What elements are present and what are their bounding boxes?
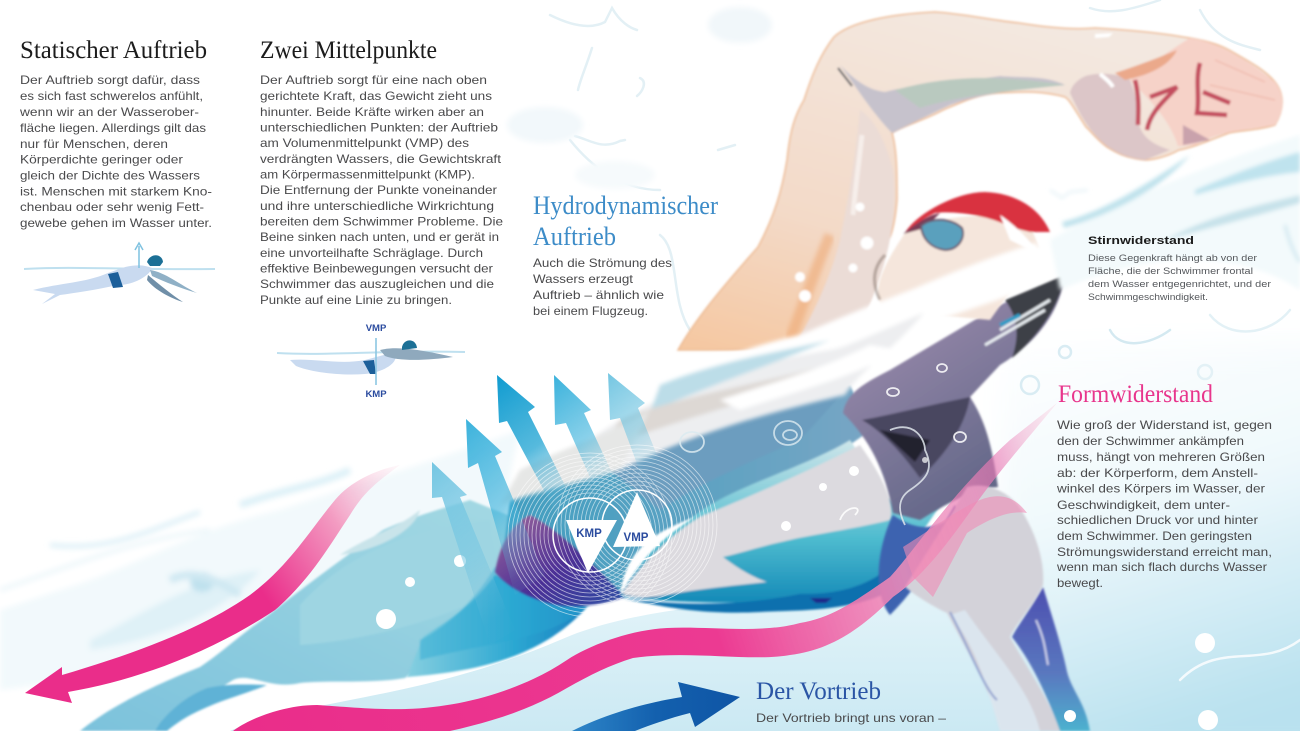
KMP label: KMP	[576, 528, 602, 540]
body text: Schwimmgeschwindigkeit.	[1088, 292, 1208, 303]
text block: Statischer Auftrieb	[19, 37, 212, 230]
body text: effektive Beinbewegungen versucht der	[260, 262, 493, 276]
body text	[19, 73, 212, 230]
pink wave arrow: form drag along the body	[233, 403, 1057, 731]
pink wake arrow pointing left	[25, 465, 400, 703]
body text: fläche liegen. Allerdings gilt das	[20, 121, 206, 135]
body text: Auftrieb – ähnlich wie	[533, 288, 664, 302]
body text: Strömungswiderstand erreicht man,	[1057, 545, 1272, 559]
body text: eine unvorteilhafte Schräglage. Durch	[260, 246, 483, 260]
swimmer: torso side and hip	[495, 385, 870, 606]
body text: verdrängten Wassers, die Gewichtskraft	[260, 152, 502, 166]
VMP label: VMP	[366, 323, 387, 334]
body text: Punkte auf eine Linie zu bringen.	[260, 293, 452, 307]
body text	[1088, 253, 1271, 303]
body text: gewebe gehen im Wasser unter.	[20, 216, 212, 230]
KMP label: KMP	[365, 389, 387, 400]
water splash on the left	[0, 430, 520, 690]
body text: hinunter. Beide Kräfte wirken aber an	[260, 105, 484, 119]
arrow 4	[554, 375, 620, 500]
body text: am Körpermassenmittelpunkt (KMP).	[260, 168, 475, 182]
body text: dem Wasser entgegenrichtet, und der	[1088, 279, 1271, 290]
swimmer: front leg	[905, 486, 1090, 731]
heading: Der Vortrieb	[756, 678, 881, 705]
body text: Fläche, die der Schwimmer frontal	[1088, 266, 1253, 277]
body text: unterschiedlichen Punkten: der Auftrieb	[260, 120, 498, 134]
body text: bewegt.	[1057, 576, 1103, 590]
arrow 5	[608, 373, 665, 485]
body text: ist. Menschen mit starkem Kno-	[20, 184, 212, 198]
icon: small swimmer with VMP and KMP	[277, 323, 465, 400]
body text: muss, hängt von mehreren Größen	[1057, 450, 1265, 464]
icon: small swimmer floating at the surface	[24, 243, 215, 304]
heading: Statischer Auftrieb	[20, 37, 207, 64]
body text: chenbau oder sehr wenig Fett-	[20, 200, 204, 214]
body text: am Volumenmittelpunkt (VMP) des	[260, 136, 469, 150]
text block: Stirnwiderstand	[1088, 235, 1271, 303]
swimmer: head with red cap and goggles	[875, 192, 1050, 320]
VMP label: VMP	[624, 532, 649, 544]
heading: Zwei Mittelpunkte	[260, 37, 437, 64]
swimmer: hip and thigh	[407, 567, 590, 677]
body text: Der Vortrieb bringt uns voran –	[756, 711, 946, 725]
arrow 3	[497, 375, 585, 530]
concentric rings around the centre points	[508, 445, 717, 617]
blue lift arrows	[432, 373, 665, 645]
body text	[1056, 418, 1272, 590]
KMP and VMP markers	[553, 490, 672, 573]
body text: dem Schwimmer. Den geringsten	[1057, 529, 1252, 543]
body text: Geschwindigkeit, dem unter-	[1057, 498, 1230, 512]
body text: schiedlichen Druck vor und hinter	[1057, 513, 1258, 527]
pink band across the front leg	[903, 496, 1027, 597]
text block: Formwiderstand	[1056, 381, 1272, 590]
water squiggles in the background	[550, 0, 1300, 680]
body text: und ihre unterschiedliche Wirkrichtung	[260, 199, 494, 213]
swimmer: raised arm	[678, 12, 1282, 350]
KMP triangle	[566, 520, 617, 573]
body text: Wassers erzeugt	[533, 272, 634, 286]
body text: den der Schwimmer ankämpfen	[1057, 434, 1244, 448]
body text	[260, 73, 503, 307]
body text: winkel des Körpers im Wasser, der	[1056, 482, 1265, 496]
body text: es sich fast schwerelos anfühlt,	[20, 89, 203, 103]
swimmer: rear leg and foot	[80, 500, 520, 731]
heading: Auftrieb	[533, 222, 616, 251]
water streaks to the right of the head	[1050, 135, 1300, 290]
body text: Schwimmer das auszugleichen und die	[260, 277, 494, 291]
body text: Auch die Strömung des	[533, 256, 672, 270]
dark blue propulsion arrow	[572, 682, 740, 731]
water swash across the swimmer	[500, 240, 1060, 505]
body text: bereiten dem Schwimmer Probleme. Die	[260, 214, 503, 228]
body text: wenn man sich flach durchs Wasser	[1056, 560, 1267, 574]
body text: nur für Menschen, deren	[20, 137, 168, 151]
arrow 2	[466, 419, 545, 595]
arrow 1	[432, 462, 515, 645]
text block: Zwei Mittelpunkte	[260, 37, 503, 307]
body text: gerichtete Kraft, das Gewicht zieht uns	[260, 89, 492, 103]
swimmer: chest and dark swimsuit area	[843, 275, 1065, 615]
body text: Der Auftrieb sorgt für eine nach oben	[260, 73, 487, 87]
bubbles and squiggles on the body	[680, 364, 966, 525]
text block: Der Vortrieb	[756, 678, 946, 725]
heading	[533, 191, 718, 251]
heading: Stirnwiderstand	[1088, 235, 1194, 247]
body text: Wie groß der Widerstand ist, gegen	[1057, 418, 1272, 432]
body text: Der Auftrieb sorgt dafür, dass	[20, 73, 200, 87]
VMP triangle	[613, 492, 660, 547]
body text: wenn wir an der Wasserober-	[19, 105, 199, 119]
body text: Körperdichte geringer oder	[20, 152, 183, 166]
body text: bei einem Flugzeug.	[533, 304, 648, 318]
swimmer: cream thigh and teal belly	[620, 440, 960, 613]
text block: Hydrodynamischer Auftrieb	[533, 191, 718, 318]
body text: gleich der Dichte des Wassers	[20, 168, 200, 182]
body text	[533, 256, 672, 318]
body text: ab: der Körperform, dem Anstell-	[1057, 466, 1258, 480]
body text: Diese Gegenkraft hängt ab von der	[1088, 253, 1257, 264]
heading: Formwiderstand	[1058, 381, 1213, 408]
heading: Hydrodynamischer	[533, 191, 718, 220]
body text: Beine sinken nach unten, und er gerät in	[260, 230, 499, 244]
body text: Die Entfernung der Punkte voneinander	[260, 183, 497, 197]
